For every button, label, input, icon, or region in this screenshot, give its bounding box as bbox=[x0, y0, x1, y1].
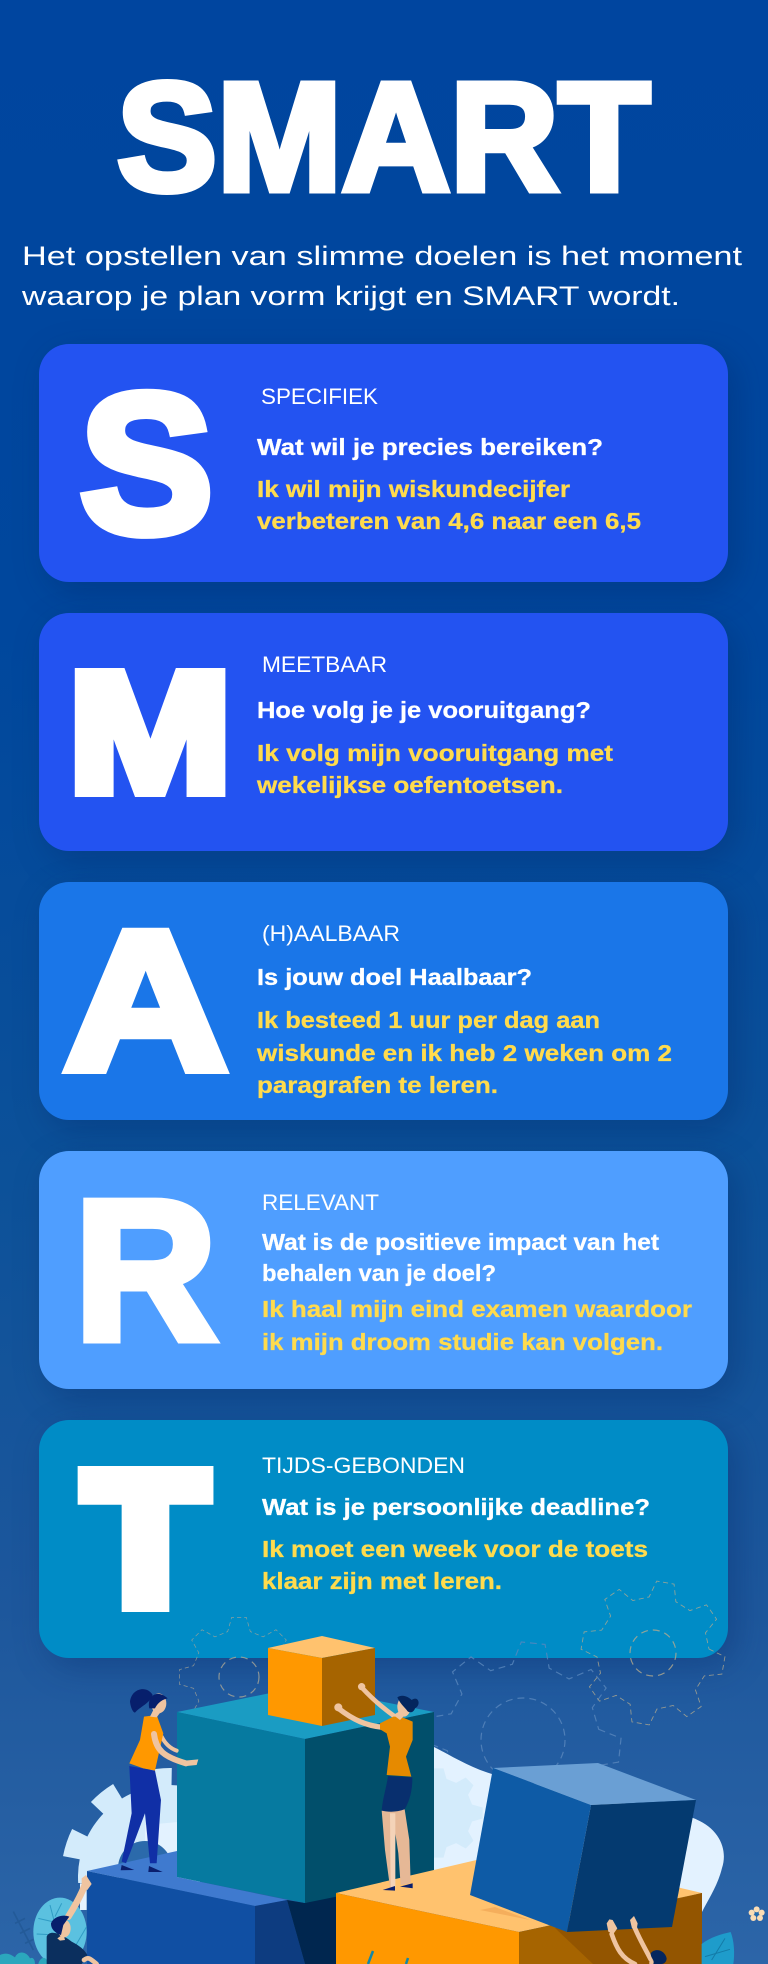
answer bbox=[257, 476, 641, 534]
block: blue base bbox=[87, 1851, 340, 1964]
question: behalen van je doel? bbox=[262, 1260, 496, 1286]
intro text: Het opstellen van slimme doelen is het moment bbox=[22, 241, 743, 271]
title: SMART bbox=[117, 51, 650, 223]
panel: R relevant bbox=[39, 1151, 728, 1389]
answer: Ik wil mijn wiskundecijfer bbox=[257, 476, 570, 502]
answer: wiskunde en ik heb 2 weken om 2 bbox=[256, 1040, 672, 1066]
panel: M meetbaar bbox=[39, 613, 728, 851]
answer bbox=[262, 1296, 692, 1355]
intro text: waarop je plan vorm krijgt en SMART wordt. bbox=[21, 281, 680, 311]
answer: paragrafen te leren. bbox=[257, 1072, 498, 1098]
illustration: team stacking blocks bbox=[0, 1570, 765, 1964]
icon: pale gear left bbox=[63, 1768, 200, 1883]
answer: Ik haal mijn eind examen waardoor bbox=[262, 1296, 692, 1322]
question: Hoe volg je je vooruitgang? bbox=[257, 697, 591, 723]
person: man bottom left bbox=[47, 1875, 97, 1964]
answer: Ik moet een week voor de toets bbox=[262, 1536, 648, 1562]
white blob bbox=[434, 1747, 724, 1912]
icon: pale gear right bbox=[393, 1768, 483, 1858]
intro text bbox=[21, 241, 743, 311]
icon: leaves bottom left bbox=[0, 1883, 87, 1964]
block: orange base bbox=[336, 1850, 702, 1964]
icon: flower bbox=[749, 1906, 765, 1921]
label: TIJDS-GEBONDEN bbox=[262, 1453, 465, 1478]
person: man bottom right bbox=[607, 1916, 667, 1964]
card background A bbox=[39, 882, 728, 1120]
answer: Ik volg mijn vooruitgang met bbox=[257, 740, 613, 766]
question: Wat wil je precies bereiken? bbox=[257, 434, 603, 460]
label: MEETBAAR bbox=[262, 652, 387, 677]
label: SPECIFIEK bbox=[261, 384, 378, 409]
icon: dashed gears bbox=[179, 1570, 736, 1847]
label: RELEVANT bbox=[262, 1190, 379, 1215]
question: Is jouw doel Haalbaar? bbox=[257, 964, 532, 990]
letter M: M bbox=[69, 638, 232, 828]
answer bbox=[262, 1536, 648, 1594]
question: Wat is je persoonlijke deadline? bbox=[262, 1494, 650, 1520]
answer: Ik besteed 1 uur per dag aan bbox=[257, 1007, 600, 1033]
person: woman left bbox=[121, 1689, 198, 1872]
block: teal cube bbox=[177, 1686, 434, 1903]
question: Wat is de positieve impact van het bbox=[262, 1229, 659, 1255]
letter S: S bbox=[80, 353, 213, 574]
label: (H)AALBAAR bbox=[262, 921, 400, 946]
answer: ik mijn droom studie kan volgen. bbox=[262, 1329, 663, 1355]
letter T: T bbox=[85, 1436, 206, 1643]
letter R: R bbox=[75, 1160, 217, 1382]
answer bbox=[256, 1007, 672, 1098]
block: tilted blue cube bbox=[470, 1763, 696, 1932]
card background T bbox=[39, 1420, 728, 1658]
card background R bbox=[39, 1151, 728, 1389]
answer: verbeteren van 4,6 naar een 6,5 bbox=[257, 508, 641, 534]
panel: S specifiek bbox=[39, 344, 728, 582]
letter A: A bbox=[64, 890, 228, 1111]
person: woman right body bbox=[380, 1696, 419, 1891]
card background M bbox=[39, 613, 728, 851]
answer: wekelijkse oefentoetsen. bbox=[256, 772, 563, 798]
panel: A haalbaar bbox=[39, 882, 728, 1120]
panel: T tijdsgebonden bbox=[39, 1420, 728, 1658]
icon: leaf bottom right bbox=[702, 1932, 734, 1964]
question bbox=[262, 1229, 659, 1286]
block: small orange cube bbox=[268, 1636, 375, 1726]
answer bbox=[256, 740, 613, 798]
card background S bbox=[39, 344, 728, 582]
person: woman right arms bbox=[334, 1683, 395, 1727]
answer: klaar zijn met leren. bbox=[262, 1568, 502, 1594]
